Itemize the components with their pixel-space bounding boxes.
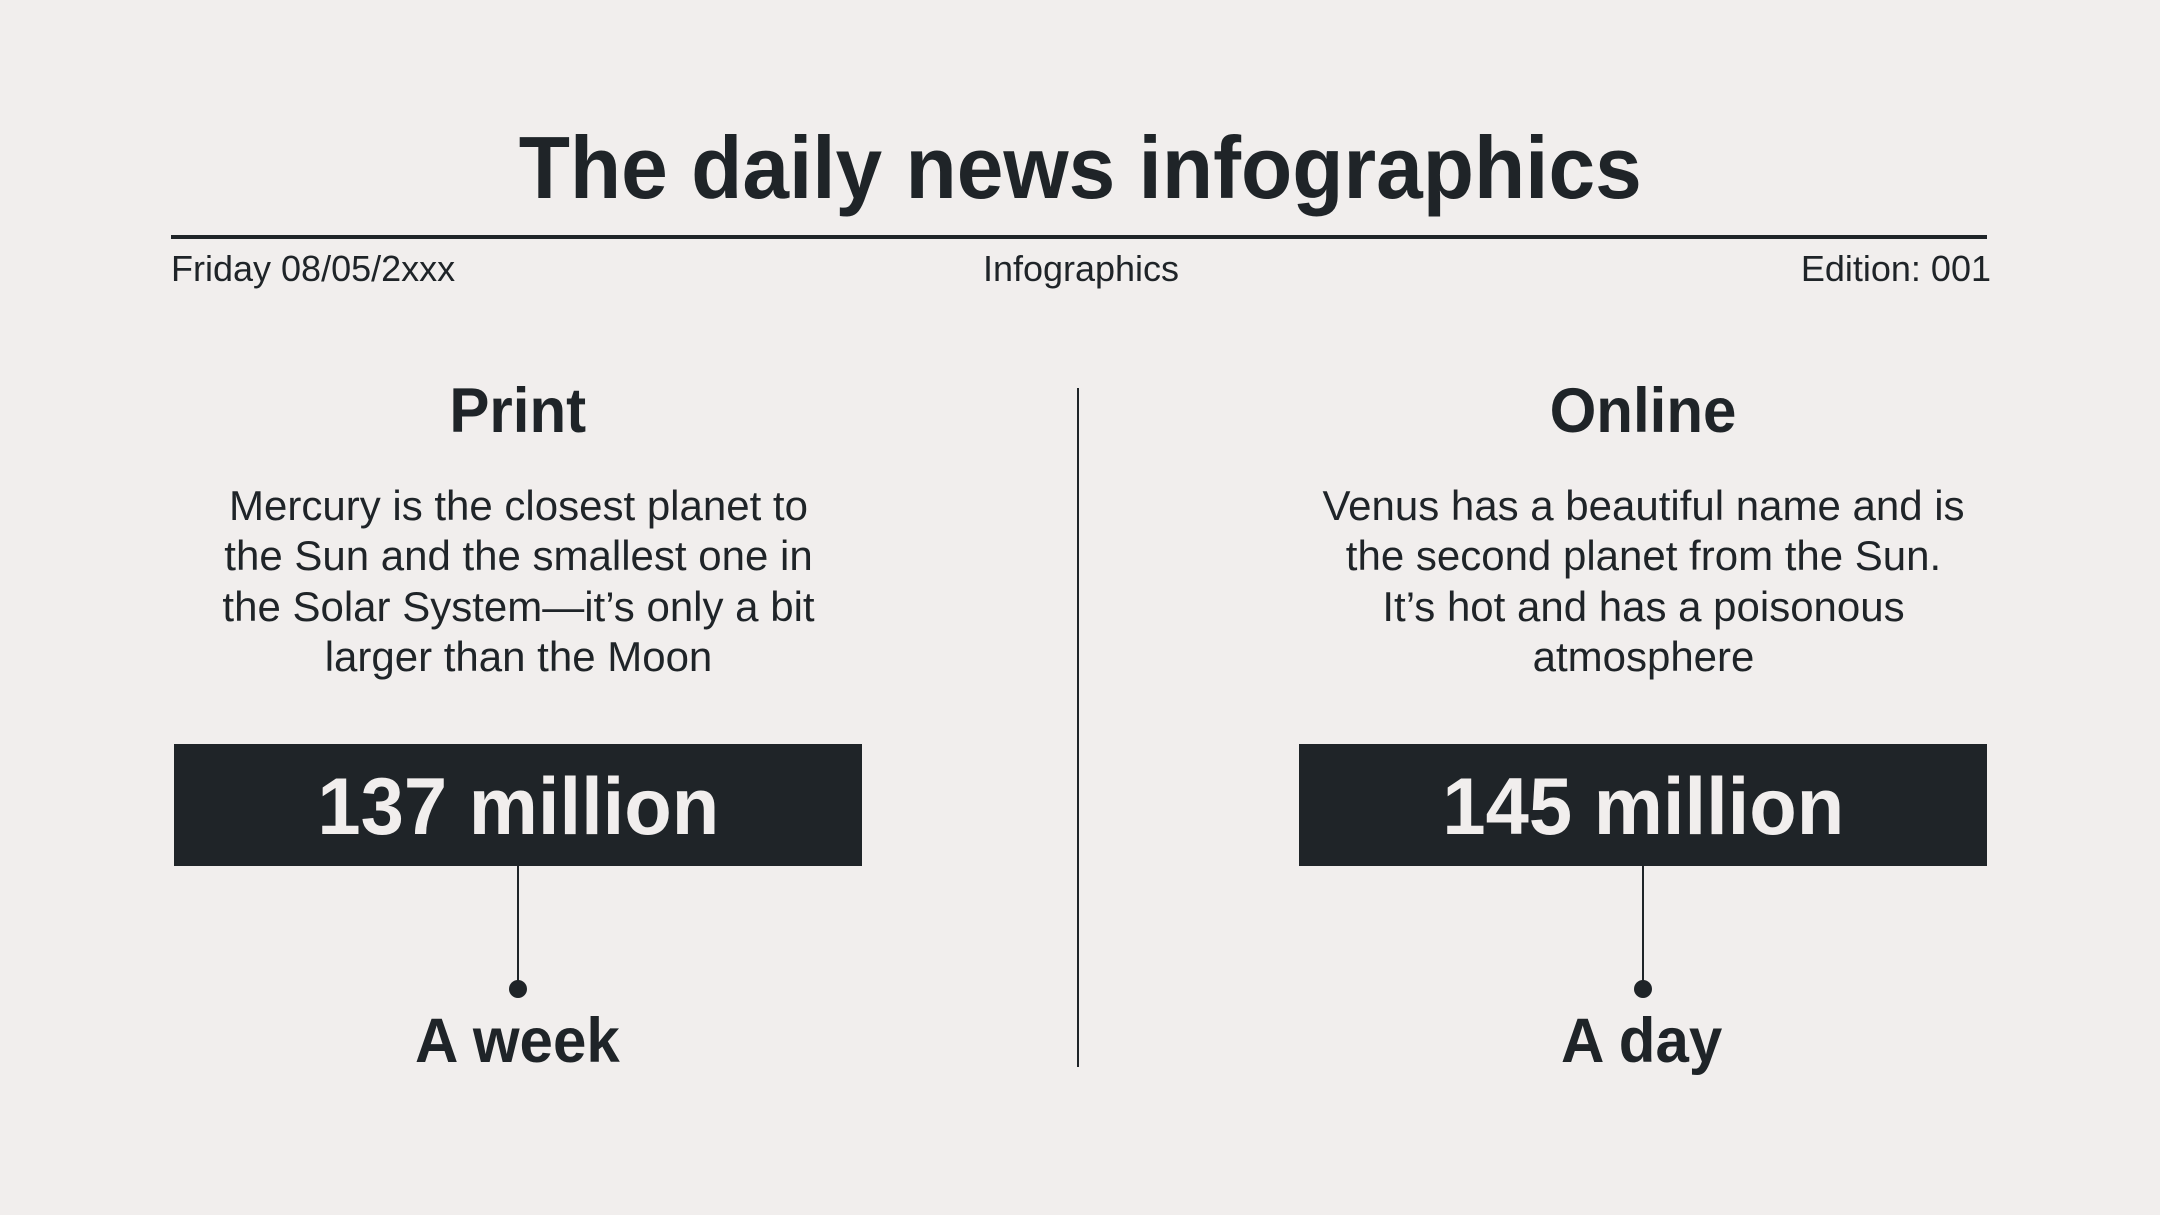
- stat box: 145 million: [1299, 744, 1987, 866]
- edition: Edition: 001: [1801, 248, 1991, 288]
- title: The daily news infographics: [518, 118, 1642, 217]
- panel: online: [1299, 376, 1987, 1076]
- stat box: 137 million: 137 million: [317, 762, 719, 852]
- connector with dot: [1634, 866, 1652, 998]
- body text: online: atmosphere: [1533, 633, 1754, 680]
- heading: print: Print: [450, 376, 586, 446]
- section label: Infographics: [983, 248, 1179, 288]
- date: Friday 08/05/2xxx: [171, 248, 455, 288]
- center divider: [1077, 388, 1079, 1067]
- stat box: 145 million: 145 million: [1442, 762, 1844, 852]
- body text: print: Mercury is the closest planet to: [229, 482, 808, 528]
- body text: online: It’s hot and has a poisonous: [1382, 583, 1905, 630]
- label: a day: A day: [1561, 1006, 1723, 1076]
- label: a week: A week: [415, 1006, 619, 1076]
- body text: print: [222, 482, 815, 680]
- heading: online: Online: [1550, 376, 1736, 446]
- connector with dot: [509, 866, 527, 998]
- stat box: 137 million: [174, 744, 862, 866]
- body text: online: [1322, 482, 1965, 680]
- body text: online: Venus has a beautiful name and is: [1322, 482, 1965, 528]
- header rule: [171, 234, 1987, 238]
- body text: print: the Solar System—it’s only a bit: [222, 583, 815, 630]
- body text: online: the second planet from the Sun.: [1346, 532, 1941, 579]
- body text: print: the Sun and the smallest one in: [224, 532, 813, 579]
- body text: print: larger than the Moon: [325, 633, 712, 680]
- panel: print: [174, 376, 862, 1076]
